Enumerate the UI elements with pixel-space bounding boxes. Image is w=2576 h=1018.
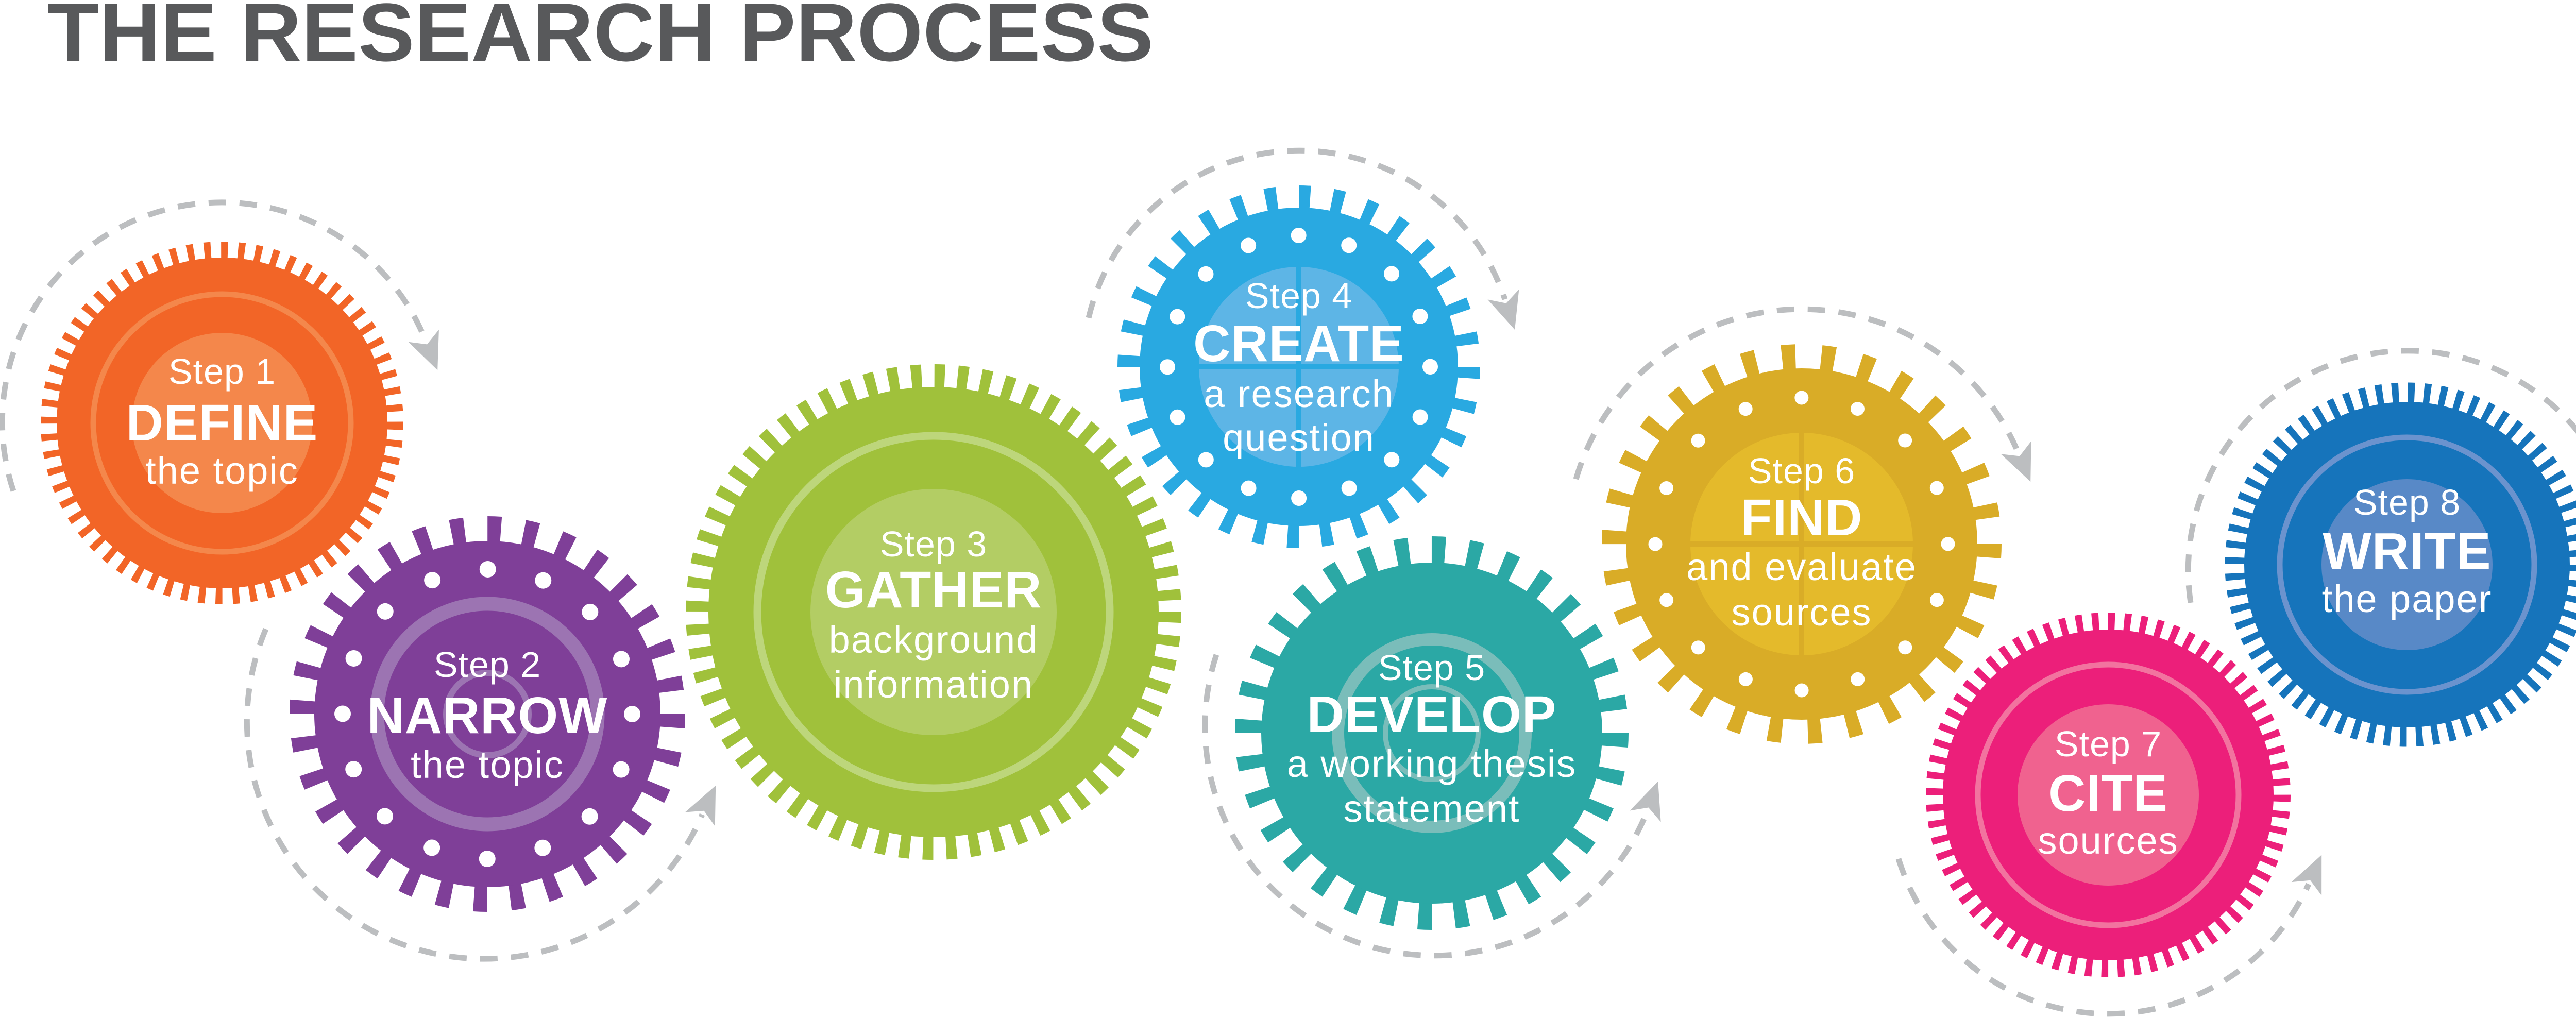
- text: step 8: WRITE: [2323, 522, 2492, 580]
- text: step 3: GATHER: [825, 561, 1042, 619]
- arrow: cycle around step 7: [1899, 859, 2309, 1014]
- gear: step 7 cite: [1936, 622, 2280, 968]
- text: step 1: [126, 351, 318, 492]
- text: step 6: sources: [1731, 591, 1872, 634]
- text: step 7: CITE: [2048, 765, 2168, 822]
- text: step 5: Step 5: [1378, 648, 1485, 688]
- text: step 5: DEVELOP: [1307, 686, 1556, 743]
- text: step 7: sources: [2038, 819, 2179, 862]
- text: step 3: Step 3: [880, 524, 987, 564]
- text: step 3: [825, 524, 1042, 706]
- arrow: cycle around step 1: [2, 202, 426, 491]
- text: step 3: information: [834, 663, 1033, 706]
- text: step 5: statement: [1344, 787, 1520, 830]
- arrow: cycle around step 6: [1576, 309, 2018, 479]
- text: step 2: Step 2: [434, 644, 541, 685]
- arrow: cycle around step 2: [247, 629, 702, 959]
- text: step 4: question: [1223, 416, 1375, 459]
- gear: step 2 narrow: [303, 530, 671, 898]
- text: step 6: [1686, 451, 1917, 634]
- text: step 4: a research: [1204, 372, 1394, 415]
- text: step 2: the topic: [411, 743, 564, 786]
- arrowhead: step 2: [685, 778, 731, 826]
- text: step 1: Step 1: [168, 351, 276, 392]
- arrowhead: step 6: [2001, 441, 2046, 488]
- text: step 4: CREATE: [1193, 315, 1404, 372]
- gear: step 6 find: [1616, 358, 1988, 731]
- text: step 4: [1193, 276, 1404, 459]
- text: step 3: background: [829, 618, 1038, 661]
- gear: step 1 define: [50, 251, 394, 595]
- arrow: cycle around step 5: [1205, 655, 1647, 956]
- text: step 4: Step 4: [1245, 276, 1352, 316]
- gear: step 4 create: [1130, 198, 1467, 536]
- gear: step 8 write: [2235, 393, 2576, 736]
- text: step 5: a working thesis: [1287, 742, 1577, 785]
- arrow: cycle around step 4: [1089, 150, 1505, 318]
- text: step 8: [2322, 482, 2492, 620]
- text: step 6: and evaluate: [1686, 546, 1917, 588]
- text: step 1: the topic: [145, 449, 299, 492]
- gear: step 3 gather: [699, 378, 1168, 846]
- arrowhead: step 5: [1630, 776, 1673, 822]
- text: step 8: the paper: [2322, 578, 2492, 620]
- arrowhead: step 1: [409, 330, 453, 376]
- arrow: cycle around step 8: [2188, 351, 2576, 603]
- gear: step 5 develop: [1250, 551, 1614, 915]
- text: step 2: [367, 644, 608, 786]
- text: step 2: NARROW: [367, 687, 608, 744]
- text: step 8: Step 8: [2353, 482, 2461, 522]
- text: step 1: DEFINE: [126, 394, 318, 452]
- text: step 6: FIND: [1740, 489, 1863, 547]
- text: step 6: Step 6: [1748, 451, 1855, 491]
- arrowhead: step 7: [2292, 848, 2336, 895]
- text: step 7: Step 7: [2055, 724, 2162, 764]
- arrowhead: step 4: [1487, 290, 1531, 335]
- text: step 5: [1287, 648, 1577, 830]
- text: step 7: [2038, 724, 2179, 862]
